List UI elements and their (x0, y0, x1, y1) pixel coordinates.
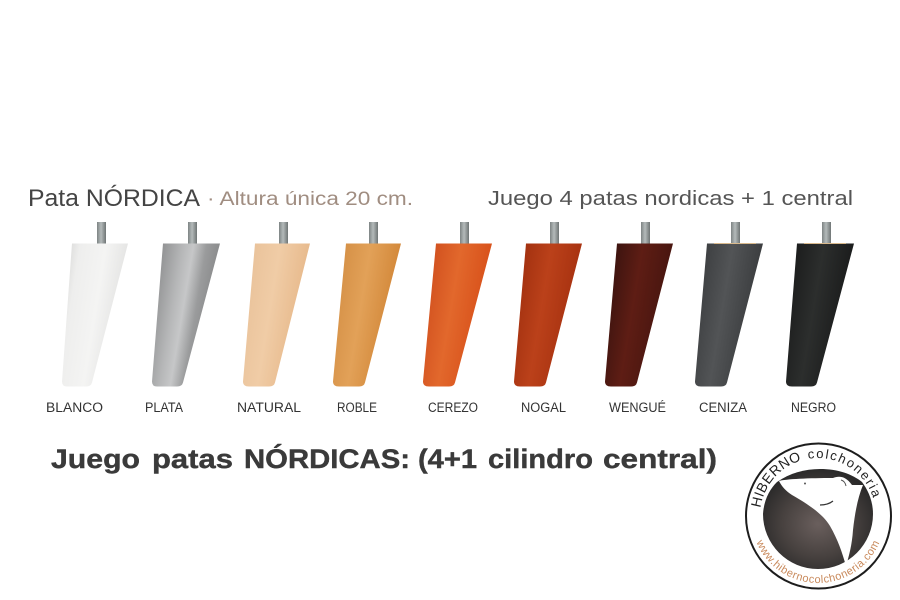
logo: bear eye (804, 482, 806, 484)
subheading: height: · Altura única 20 cm. (207, 189, 413, 210)
leg: nogal (514, 222, 582, 386)
logo: Hiberno colchonería (745, 442, 892, 590)
main caption: cilindro (488, 444, 593, 474)
colour labels: BLANCO (46, 400, 103, 415)
colour labels (46, 400, 836, 415)
leg: cerezo (423, 222, 492, 386)
logo: bear mouth (820, 501, 833, 505)
main caption: Juego (51, 444, 140, 474)
colour labels: CEREZO (428, 400, 478, 415)
colour labels: NOGAL (521, 400, 566, 415)
leg: ceniza (695, 222, 763, 386)
main caption: (4+1 (418, 444, 477, 474)
main caption: NÓRDICAS: (244, 443, 410, 474)
logo: dark disc (763, 469, 873, 569)
colour labels: NEGRO (791, 400, 836, 415)
leg: plata (152, 222, 220, 386)
leg: roble (333, 222, 401, 386)
leg: natural (243, 222, 310, 386)
logo: bear silhouette (779, 477, 863, 566)
main caption: patas (152, 444, 233, 474)
colour labels: CENIZA (699, 400, 747, 415)
colour labels: NATURAL (237, 400, 302, 415)
heading: set contents: Juego 4 patas nordicas + 1 central (488, 188, 853, 210)
colour labels: PLATA (145, 400, 183, 415)
logo: bear ear (841, 480, 846, 486)
heading: Pata NÓRDICA: Pata NÓRDICA (28, 185, 200, 212)
main caption (51, 443, 717, 474)
main caption: central) (603, 444, 717, 474)
logo: brand ring text: HIBERNO colchoneria (751, 449, 879, 507)
colour labels: ROBLE (337, 400, 377, 415)
colour labels: WENGUÉ (609, 400, 666, 415)
logo: web address ring text: www.hibernocolchoneria.com (757, 540, 880, 584)
leg: negro (786, 222, 854, 386)
leg: blanco (62, 222, 128, 386)
leg: wengué (605, 222, 673, 386)
